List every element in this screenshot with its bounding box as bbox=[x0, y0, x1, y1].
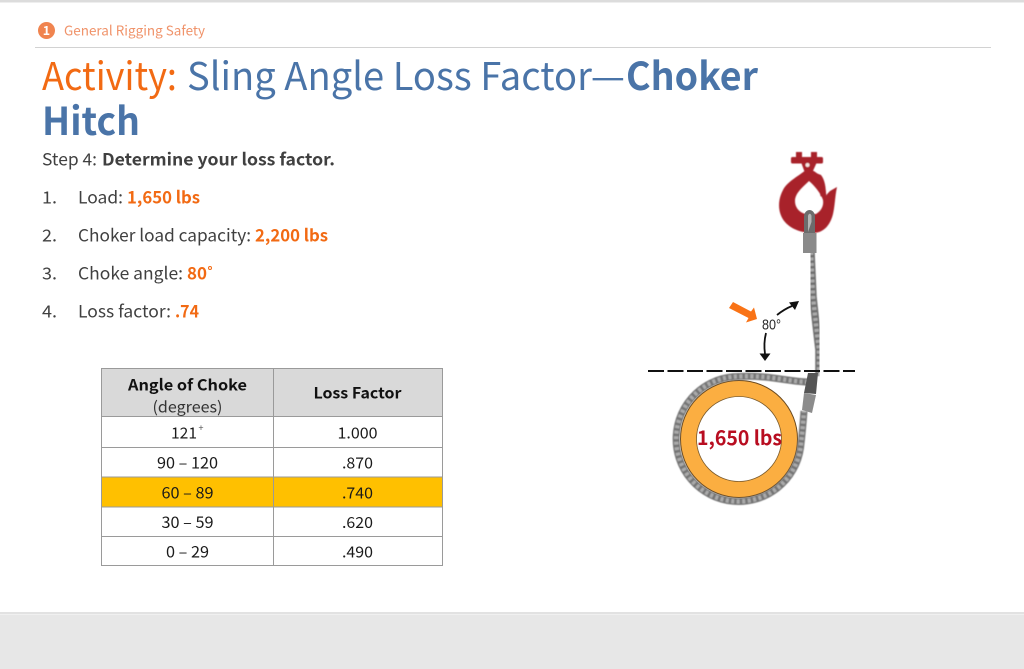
title: Hitch bbox=[42, 91, 140, 147]
item: choker load capacity: 2. bbox=[42, 222, 57, 247]
title: Choker bbox=[626, 46, 758, 102]
icon: section number badge: 1 bbox=[43, 20, 50, 39]
icon: load ring bbox=[680, 380, 798, 498]
table rows: 90 – 120 bbox=[157, 452, 218, 474]
table: loss factors bbox=[102, 368, 442, 566]
table header: Angle of Choke bbox=[127, 374, 247, 396]
table header bbox=[127, 374, 402, 418]
table rows: .870 bbox=[342, 452, 373, 474]
item: loss factor: Loss factor: bbox=[78, 298, 171, 323]
table rows: .490 bbox=[342, 540, 373, 562]
table rows bbox=[157, 421, 378, 562]
item: loss factor: 4. bbox=[42, 298, 57, 323]
diagram: choker hitch bbox=[648, 152, 855, 501]
item: load: 1,650 lbs bbox=[127, 184, 200, 209]
table rows: 1.000 bbox=[338, 422, 378, 444]
table header: (degrees) bbox=[152, 396, 222, 418]
title bbox=[42, 46, 758, 147]
arrow: orange pointer bbox=[729, 302, 757, 322]
item: choker load capacity bbox=[42, 222, 328, 247]
table header: Loss Factor bbox=[314, 382, 402, 404]
item: load: 1. bbox=[42, 184, 57, 209]
angle label: 80° bbox=[762, 318, 781, 334]
item: choke angle: Choke angle: bbox=[78, 260, 183, 285]
item: load bbox=[42, 184, 200, 209]
title: Activity: bbox=[42, 46, 177, 102]
table rows: 30 – 59 bbox=[162, 511, 214, 533]
item: load: Load: bbox=[78, 184, 123, 209]
dashed reference line bbox=[648, 370, 855, 372]
icon: rope eye and ferrule at hook bbox=[803, 210, 816, 253]
step heading: Step 4: bbox=[42, 146, 97, 171]
arrow: angle up bbox=[777, 301, 799, 315]
item: choke angle: 80 bbox=[187, 260, 207, 285]
footer bar bbox=[0, 612, 1024, 669]
item: loss factor: .74 bbox=[175, 298, 199, 323]
load weight label: 1,650 lbs bbox=[697, 422, 782, 451]
icon: rope ferrule at choke bbox=[802, 373, 818, 413]
step heading: Determine your loss factor. bbox=[102, 146, 335, 171]
table rows: + bbox=[198, 421, 204, 434]
title: Sling Angle Loss Factor— bbox=[187, 46, 625, 102]
table rows: 121 bbox=[171, 422, 197, 444]
icon: wire rope around load bbox=[676, 376, 808, 501]
icon: red hook bbox=[779, 152, 837, 233]
item: loss factor bbox=[42, 298, 199, 323]
numbered list bbox=[42, 184, 328, 323]
table rows: 0 – 29 bbox=[166, 540, 209, 562]
table rows: .620 bbox=[342, 511, 373, 533]
table rows: 60 – 89 bbox=[162, 482, 214, 504]
item: choker load capacity: Choker load capacity: bbox=[78, 222, 251, 247]
icon: section number badge bbox=[38, 20, 55, 39]
table rows: .740 bbox=[342, 482, 373, 504]
item: choke angle bbox=[42, 260, 212, 285]
item: choker load capacity: 2,200 lbs bbox=[255, 222, 328, 247]
icon: wire rope vertical leg bbox=[811, 252, 819, 376]
arrow: angle down bbox=[760, 333, 770, 361]
item: choke angle: 3. bbox=[42, 260, 57, 285]
section label: General Rigging Safety bbox=[64, 20, 205, 40]
section header bbox=[35, 20, 991, 48]
